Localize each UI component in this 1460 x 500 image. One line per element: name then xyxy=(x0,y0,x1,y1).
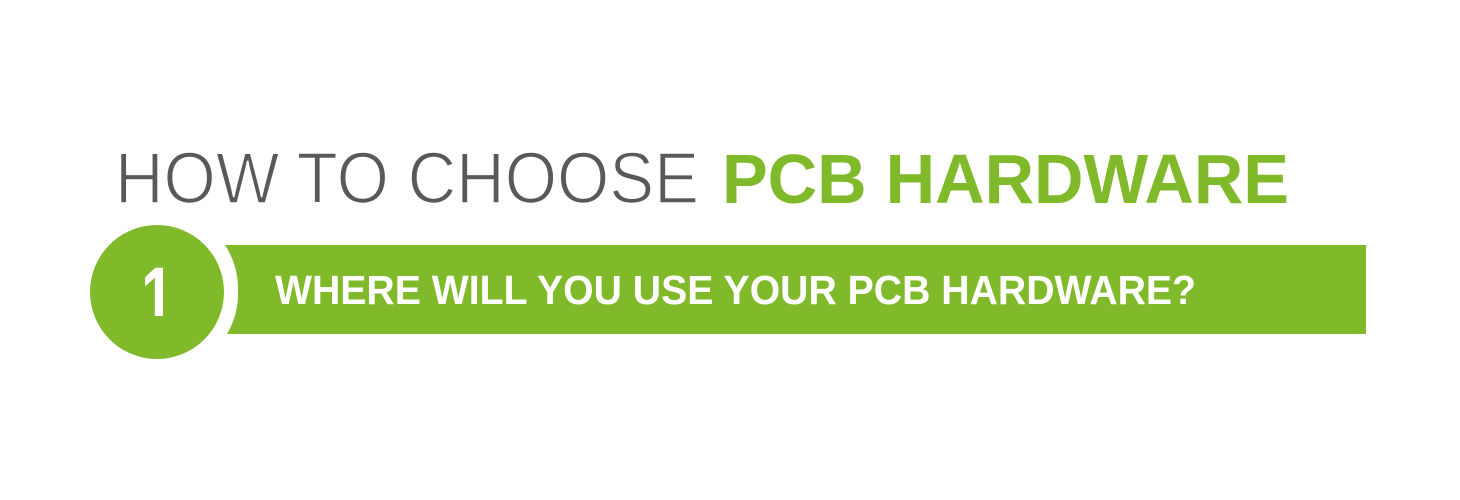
banner: question 1 xyxy=(225,245,1366,334)
badge number: 1 xyxy=(141,250,174,344)
banner bar xyxy=(225,245,1366,334)
title: bold green part: PCB HARDWARE xyxy=(722,140,1289,218)
title xyxy=(115,139,1289,219)
number badge xyxy=(90,225,224,359)
banner text: WHERE WILL YOU USE YOUR PCB HARDWARE? xyxy=(275,267,1196,313)
badge circle xyxy=(90,225,224,359)
title: light part: HOW TO CHOOSE xyxy=(115,139,699,219)
